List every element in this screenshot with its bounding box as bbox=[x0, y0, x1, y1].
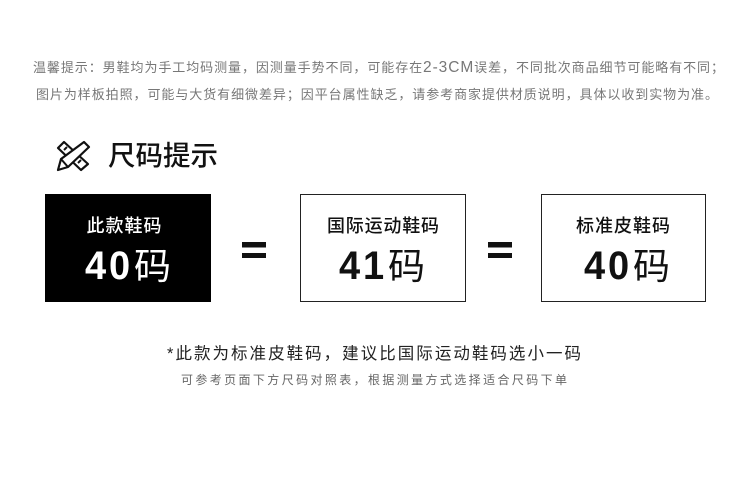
notice text block bbox=[33, 59, 724, 103]
equals sign bbox=[242, 242, 266, 258]
panel: this shoe size: 40 bbox=[85, 244, 133, 288]
panel: international sports shoe size: 41 bbox=[339, 244, 387, 288]
panel: international sports shoe size bbox=[300, 194, 466, 302]
panel: standard leather shoe size bbox=[542, 194, 706, 302]
icon: pencil and ruler bbox=[58, 142, 89, 170]
panel: standard leather shoe size: 40 bbox=[584, 244, 632, 288]
panel: this shoe size: 码 bbox=[134, 246, 171, 287]
footnote secondary: 可参考页面下方尺码对照表，根据测量方式选择适合尺码下单 bbox=[181, 372, 567, 387]
notice text block: 图片为样板拍照，可能与大货有细微差异；因平台属性缺乏，请参考商家提供材质说明，具体以收到实物为准。 bbox=[36, 87, 718, 103]
notice text block: 温馨提示：男鞋均为手工均码测量，因测量手势不同，可能存在2-3CM误差，不同批次商品细节可能略有不同； bbox=[33, 59, 724, 76]
panel: this shoe size: 此款鞋码 bbox=[86, 216, 162, 236]
panel: standard leather shoe size: 码 bbox=[633, 246, 670, 287]
equals sign bbox=[488, 242, 512, 258]
panel: standard leather shoe size: 标准皮鞋码 bbox=[576, 216, 670, 236]
panel: international sports shoe size: 国际运动鞋码 bbox=[327, 216, 439, 236]
footnote main: *此款为标准皮鞋码，建议比国际运动鞋码选小一码 bbox=[167, 344, 581, 363]
panel: international sports shoe size: 码 bbox=[388, 246, 425, 287]
heading: 尺码提示 bbox=[108, 140, 218, 171]
panel: this shoe size bbox=[45, 194, 211, 302]
